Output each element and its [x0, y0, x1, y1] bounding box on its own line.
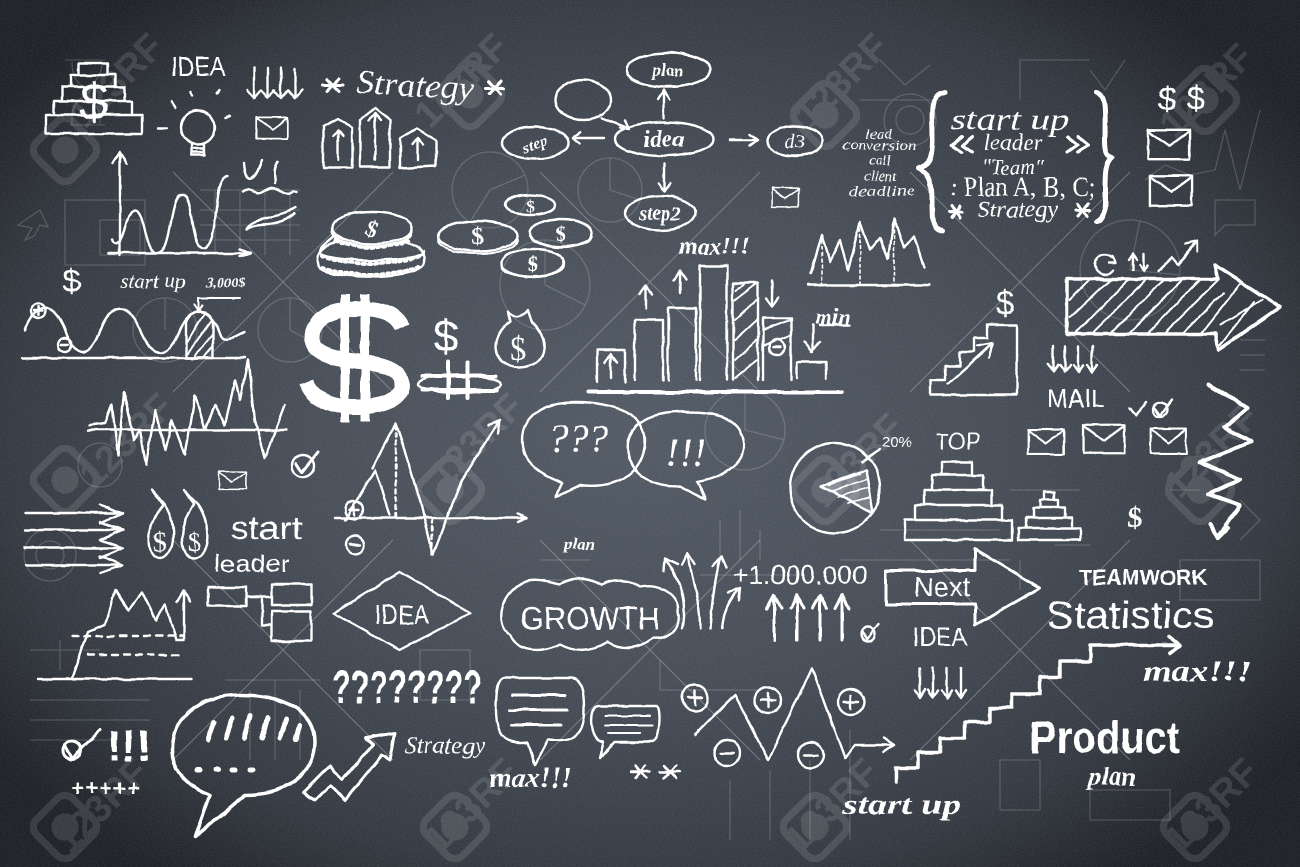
icon: small pyramid [1018, 492, 1080, 540]
text block: start up braces: start up [951, 101, 1069, 137]
watermark: 123RF stamps: 123RF [802, 406, 912, 516]
arrow: Next [886, 549, 1040, 625]
icon: staircase with dollar: $ [996, 284, 1014, 321]
icon: zigzag down arrow [1200, 384, 1252, 538]
watermark diagonals [173, 172, 1130, 760]
text: start up 3,000$ [121, 269, 245, 293]
cloud: GROWTH: GROWTH [520, 600, 660, 637]
flow chart: plan / idea / step: step [520, 132, 550, 157]
text: question marks: ???????? [332, 661, 482, 713]
icon: envelope [1148, 130, 1190, 159]
speech bubbles: question and exclamation: !!! [666, 430, 706, 475]
text block: start up braces [918, 92, 1112, 231]
icon: arrows pointing right [25, 505, 123, 573]
icon: asterisks [632, 766, 680, 778]
text block: start up braces: Strategy [978, 197, 1058, 223]
icon: coins group: $ [556, 222, 566, 246]
icon: down arrows [1048, 346, 1097, 372]
diagram: connected boxes [208, 584, 311, 641]
small squiggles [242, 160, 296, 229]
text block: lead list: conversion [842, 138, 916, 154]
text: plan: plan [1086, 762, 1136, 791]
flow chart: plan / idea / step: plan [650, 61, 684, 80]
text: start up 3,000$: 3,000$ [206, 276, 245, 291]
icon: check mark [861, 624, 879, 641]
watermark: 123RF stamps: 123RF [787, 26, 897, 136]
icon: money bag: $ [510, 331, 526, 368]
icon: double dollar: $ [1187, 80, 1206, 118]
text: start up 3,000$: start up [121, 269, 185, 293]
icon: coins group [438, 195, 592, 277]
speech bubble: small [591, 706, 659, 758]
text: start: start [230, 510, 302, 546]
watermark: 123RF stamps: 123RF [407, 26, 517, 136]
chart: bar chart [588, 266, 851, 392]
icon: big hatched arrow [1067, 265, 1280, 350]
watermark: 123RF stamps: 123RF [777, 751, 887, 861]
icon: check mark [63, 730, 100, 759]
chart: spiky line [808, 218, 930, 285]
text: plus row: +++++ [71, 776, 141, 801]
icon: envelope [1150, 176, 1192, 205]
icon: curved up arrows [664, 553, 740, 628]
chart: area with dashes [38, 590, 192, 679]
text: start up: start up [842, 789, 961, 821]
text: +1.000.000: +1.000.000 [733, 560, 867, 590]
icon: envelope [257, 117, 287, 139]
watermark: 123RF stamps: 123RF [422, 386, 532, 496]
watermark: 123RF stamps: 123RF [1157, 751, 1267, 861]
arrow: Next: Next [914, 572, 970, 602]
text block: lead list: call [869, 153, 891, 169]
watermark: 123RF stamps: 123RF [47, 751, 157, 861]
icon: two money bags: $ [187, 527, 201, 557]
icon: light bulb [158, 90, 230, 155]
icon: dollar pyramid [46, 63, 142, 134]
heading: max: max!!! [679, 234, 749, 260]
text: Statistics: Statistics [1046, 595, 1214, 637]
flow chart: plan / idea / step: d3 [785, 131, 805, 153]
watermark: 123RF stamps: 123RF [72, 386, 182, 496]
icon: coins group: $ [472, 224, 484, 249]
text block: lead list: deadline [849, 184, 915, 200]
icon: dollar with hash [418, 310, 500, 398]
chart: pie with 20% [790, 434, 912, 533]
icon: small dollar: $ [63, 262, 81, 299]
heading: IDEA: IDEA [171, 51, 225, 82]
icons above the arrow [1095, 241, 1197, 275]
icon: coins group: $ [526, 196, 534, 216]
icon: down arrows [247, 68, 302, 98]
text block: lead list [842, 127, 916, 200]
text: max: max!!! [490, 763, 572, 794]
speech bubble: lines [496, 678, 584, 765]
arrow: zigzag up [303, 733, 395, 800]
heading: Strategy: Strategy [356, 65, 476, 107]
chart: volatile line [88, 360, 287, 465]
heading: MAIL: MAIL [1047, 385, 1105, 413]
icon: check mark [292, 452, 318, 477]
flow chart: plan / idea / step: step2 [638, 203, 681, 225]
chart: wave with plus and minus [22, 298, 245, 358]
icon: coins group: $ [528, 252, 538, 276]
icon: envelopes with checks [1028, 400, 1186, 454]
icon: big dollar [306, 294, 402, 422]
text block: start up braces: leader [984, 130, 1043, 155]
icon: stacked coins: $ [361, 215, 383, 243]
icon: two money bags: $ [153, 527, 167, 557]
icon: two money bags [149, 490, 207, 558]
speech bubble: slashes [172, 695, 315, 837]
watermark: 123RF stamps: 123RF [1152, 36, 1262, 146]
speech bubbles: question and exclamation: ??? [548, 416, 608, 461]
text: Strategy: Strategy [405, 733, 485, 759]
text: max: max!!! [1143, 655, 1251, 688]
icon: dollar pyramid: $ [80, 73, 109, 131]
icon: down arrows [915, 668, 966, 698]
chart: pie with 20%: 20% [882, 434, 912, 451]
text: IDEA: IDEA [913, 622, 967, 652]
arrow: staircase up [896, 637, 1180, 782]
watermark: 123RF stamps: 123RF [417, 751, 527, 861]
chart: triangle peaks [335, 420, 527, 555]
icon: dollar with hash: $ [433, 310, 459, 362]
text block: lead list: client [863, 169, 897, 185]
diamond: IDEA: IDEA [375, 599, 429, 630]
icon: small dollar: $ [1128, 501, 1142, 534]
text: exclamation marks: !!! [107, 722, 151, 771]
flow chart: plan / idea / step [502, 53, 823, 230]
text: Product: Product [1030, 712, 1180, 763]
cloud: GROWTH [501, 578, 679, 650]
text: leader: leader [214, 551, 290, 578]
icon: envelope [772, 188, 798, 207]
text block: start up braces: : Plan A, B, C; [950, 172, 1096, 202]
icon: four up arrows [767, 595, 849, 640]
text block: lead list: lead [866, 127, 892, 143]
icon: double dollar: $ [1158, 80, 1177, 118]
chart: bar chart: min [815, 304, 851, 329]
chart: plus minus line [682, 668, 894, 768]
heading: Strategy [323, 65, 504, 107]
icon: double dollar [1158, 80, 1206, 118]
icon: staircase with dollar [930, 284, 1017, 395]
icon: stacked coins [317, 212, 424, 277]
flow chart: plan / idea / step: idea [643, 127, 685, 153]
chart: peaks line graph [108, 152, 250, 256]
heading: TOP: TOP [936, 429, 980, 454]
text block: start up braces: "Team" [982, 155, 1044, 179]
text: TEAMWORK: TEAMWORK [1079, 565, 1207, 590]
diamond: IDEA [333, 572, 470, 650]
watermark: 123RF stamps: 123RF [62, 26, 172, 136]
icon: house arrows [323, 108, 436, 168]
icon: large pyramid [905, 462, 1012, 540]
icon: envelope [219, 471, 246, 490]
icon: money bag [496, 310, 544, 368]
text: plan: plan [562, 535, 596, 554]
watermark: 123RF stamps: 123RF [1157, 396, 1267, 506]
speech bubbles: question and exclamation [522, 402, 744, 500]
